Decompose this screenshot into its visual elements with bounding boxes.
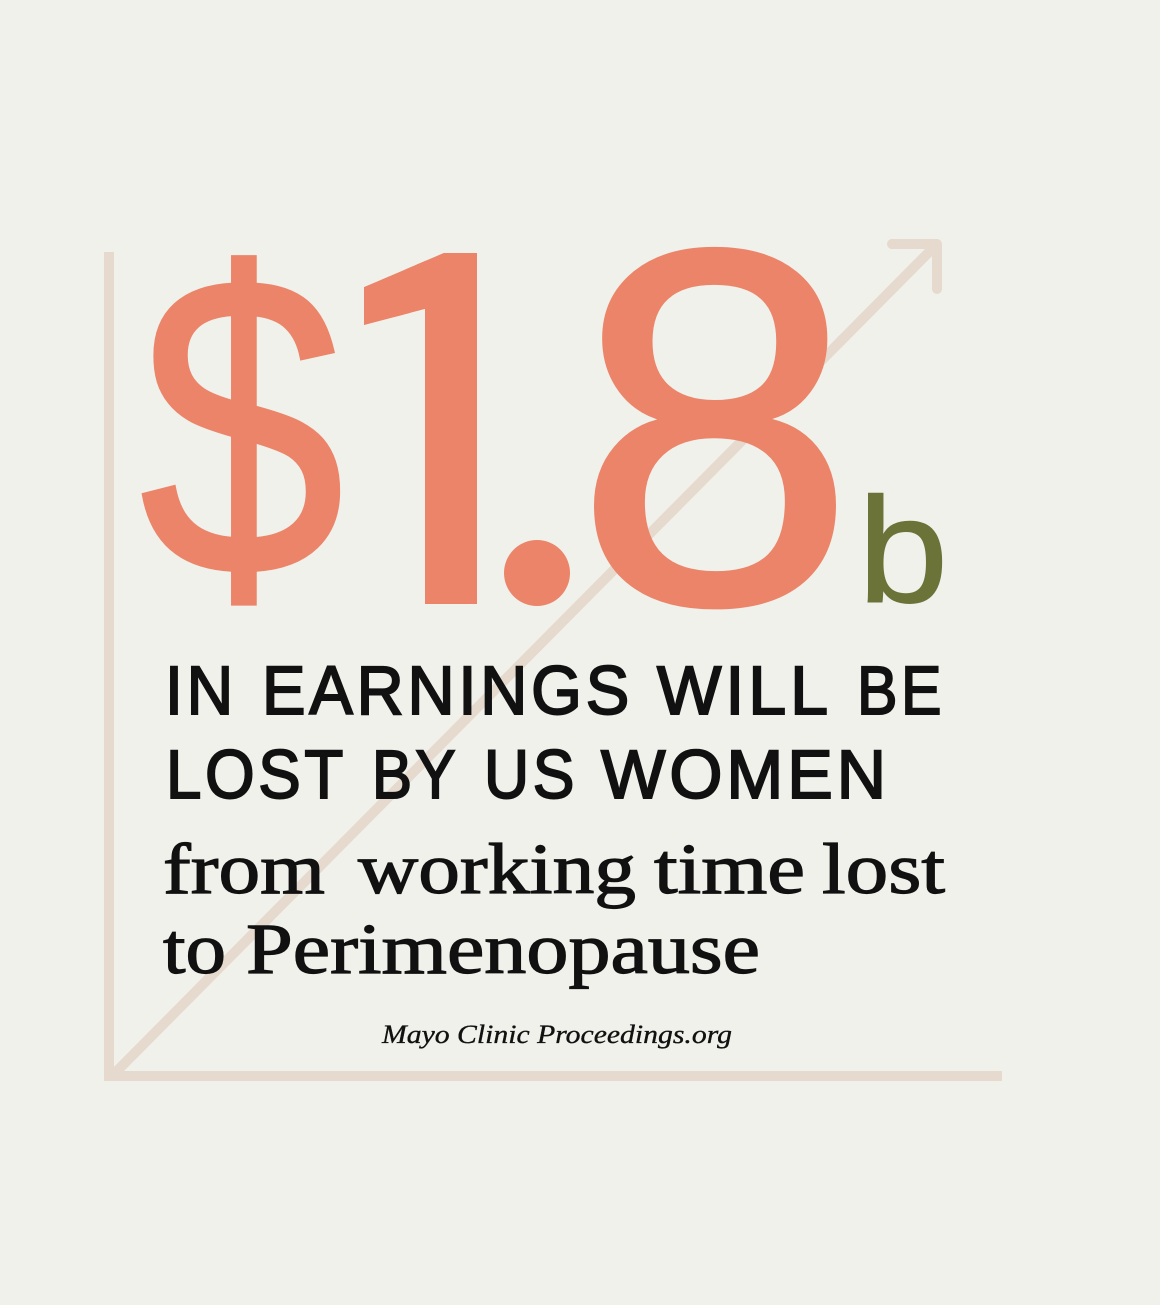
- chart axes and rising arrow: [109, 244, 1002, 1076]
- headline: BY: [372, 736, 459, 813]
- digit 1: 1: [301, 143, 585, 713]
- subheading: time: [654, 829, 805, 909]
- infographic canvas: [104, 239, 1002, 1081]
- subheading: to: [163, 909, 226, 989]
- source credit: Mayo Clinic Proceedings.org: [381, 1020, 732, 1049]
- subheading: lost: [822, 829, 945, 909]
- billions suffix: b: [858, 467, 948, 635]
- subheading: working: [358, 829, 636, 909]
- headline: WOMEN: [601, 736, 890, 813]
- headline: IN: [165, 652, 237, 729]
- headline: WILL: [657, 652, 832, 729]
- big figure: $1.8b: [142, 246, 942, 610]
- subheading: from: [163, 829, 325, 909]
- headline: LOST: [166, 736, 347, 813]
- headline: BE: [857, 652, 945, 729]
- headline: EARNINGS: [262, 652, 633, 729]
- headline: [165, 652, 945, 813]
- digit 1: [364, 253, 477, 604]
- digit 8: 8: [575, 146, 855, 710]
- headline: US: [484, 736, 578, 813]
- subheading: [163, 829, 945, 989]
- dollar sign: $: [140, 187, 344, 665]
- decimal point: [504, 540, 570, 606]
- subheading: Perimenopause: [246, 909, 760, 989]
